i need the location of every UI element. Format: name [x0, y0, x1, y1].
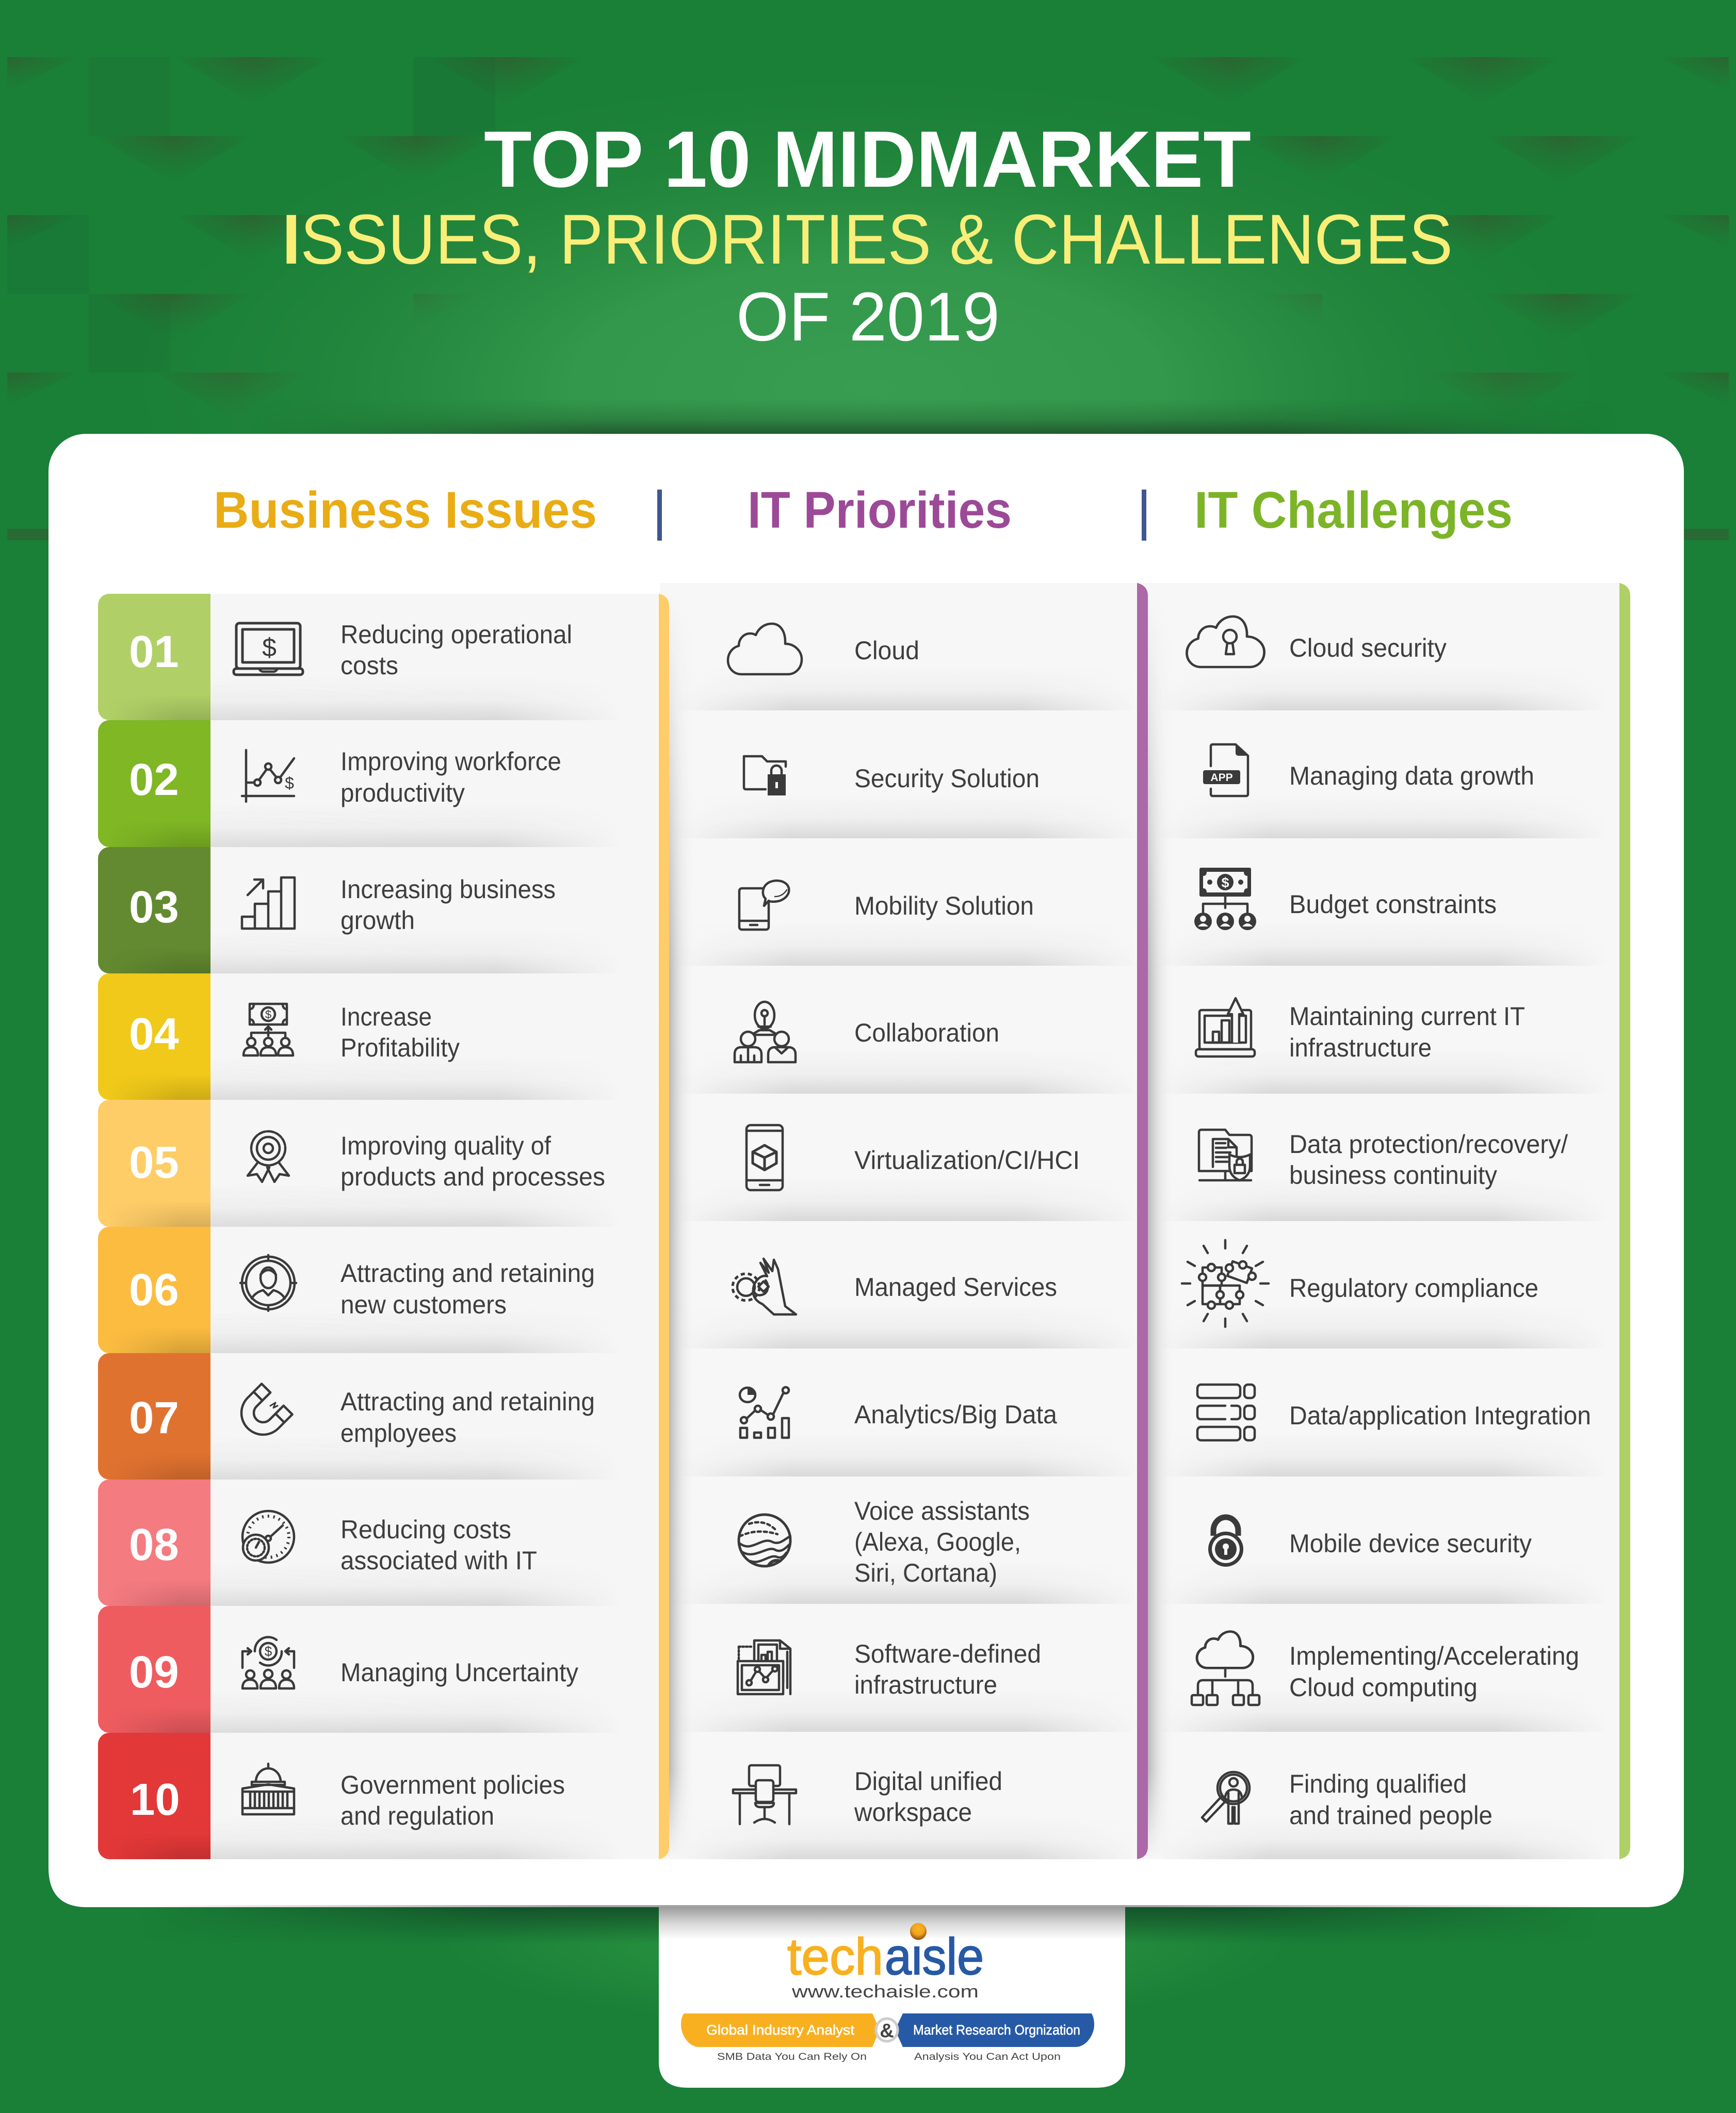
icon: cloud [728, 624, 802, 674]
icon: desk workspace [733, 1765, 796, 1824]
text: reducing costs: associated with IT [340, 1546, 537, 1575]
heading: it challenges: IT Challenges [1194, 481, 1513, 539]
text: improving workforce productivity [340, 747, 561, 807]
icon: mobile with speech bubble [739, 881, 789, 930]
text: managing uncertainty: Managing Uncertainty [340, 1658, 578, 1687]
text: software-defined infrastructure [854, 1639, 1041, 1699]
panel: footer logo card [659, 1904, 1125, 2088]
text: analytics/big data: Analytics/Big Data [854, 1400, 1057, 1429]
icon: voice globe [739, 1515, 790, 1566]
icon: cloud network [1192, 1632, 1259, 1705]
text: maintaining current it infrastructure: Maintaining current IT [1289, 1002, 1525, 1031]
text: increase profitability [340, 1002, 460, 1062]
accent bar: purple [1137, 583, 1148, 1859]
text: new customers [340, 1259, 595, 1319]
icon: budget constraints: $ [1221, 875, 1229, 890]
row 01 [98, 594, 621, 720]
icon: software-defined dashboard [738, 1640, 790, 1694]
text: mobility solution: Mobility Solution [854, 891, 1034, 920]
icon: budget constraints [1194, 868, 1256, 930]
text: cloud: Cloud [854, 636, 919, 665]
text: voice assistants: Siri, Cortana) [854, 1558, 997, 1587]
text: data protection: Data protection/recovery/ [1289, 1130, 1568, 1159]
text: improving quality [340, 1131, 605, 1191]
number badge 09: 09 [129, 1647, 179, 1697]
text: employees: Attracting and retaining [340, 1387, 595, 1416]
text: reducing operational costs [340, 620, 572, 680]
text: improving workforce productivity: Improving workforce [340, 747, 561, 776]
icon: money and team: $ [265, 1008, 271, 1021]
number badge 02 [98, 720, 221, 847]
row 05 [98, 1100, 621, 1227]
number badge 03: 03 [129, 882, 179, 932]
icon: gauge [242, 1511, 294, 1563]
icon: padlock [1208, 1517, 1243, 1567]
text: voice assistants [854, 1497, 1030, 1587]
number badge 01 [98, 594, 221, 720]
text: government policies [340, 1770, 565, 1830]
icon: collaboration [735, 1002, 796, 1062]
text: increasing business growth [340, 875, 556, 935]
icon: data protection folder [1199, 1130, 1252, 1180]
text: data/application integration: Data/application Integration [1289, 1401, 1591, 1430]
banner: market research organization: Market Research Orgnization [913, 2022, 1080, 2038]
logo: techaisle: tech [787, 1928, 883, 1986]
banner: global industry analyst: Global Industry Analyst [706, 2022, 855, 2038]
title: TOP 10 MIDMARKET [484, 115, 1251, 204]
heading: business issues: Business Issues [214, 481, 597, 539]
text: collaboration: Collaboration [854, 1018, 999, 1047]
number badge 10: 10 [130, 1775, 180, 1825]
text: improving quality: products and processes [340, 1162, 605, 1191]
text: increase profitability: Increase [340, 1002, 432, 1031]
panel: business issues column [98, 594, 660, 1859]
icon: analytics [740, 1387, 789, 1438]
number badge 01: 01 [129, 627, 179, 677]
title: ISSUES, PRIORITIES & CHALLENGES [282, 200, 1453, 279]
text: software-defined infrastructure: Software-defined [854, 1639, 1041, 1668]
panel: it challenges column [1137, 583, 1630, 1859]
row 07 [98, 1353, 621, 1480]
card body [48, 516, 1684, 1907]
text: managing data growth: Managing data growth [1289, 761, 1534, 790]
icon: app file: APP [1210, 772, 1233, 784]
text: reducing operational costs: Reducing operational [340, 620, 572, 649]
icon: uncertainty people and dollar [242, 1637, 294, 1688]
icon: chart with dollar: $ [285, 774, 294, 792]
icon: growth bars [242, 877, 295, 929]
text: security solution: Security Solution [854, 764, 1040, 793]
icon: managed services hand and gear [733, 1259, 796, 1314]
icon: customer target [240, 1255, 296, 1311]
text: finding qualified people [1289, 1769, 1492, 1830]
text: new customers: Attracting and retaining [340, 1259, 595, 1288]
row 06 [98, 1227, 621, 1353]
number badge 05 [98, 1100, 221, 1227]
banner: global industry analyst [681, 2013, 880, 2047]
icon: app file [1203, 744, 1248, 796]
tagline left: SMB Data You Can Rely On [717, 2052, 867, 2062]
divider 1 [657, 490, 662, 541]
number badge 06: 06 [129, 1265, 179, 1315]
number badge 08: 08 [129, 1520, 179, 1570]
text: government policies: and regulation [340, 1801, 494, 1830]
text: reducing costs [340, 1515, 537, 1575]
icon: magnet [233, 1384, 293, 1443]
row 04 [98, 973, 621, 1100]
text: new customers: new customers [340, 1290, 507, 1319]
logo: techaisle: aisle [885, 1928, 984, 1986]
icon: phone with cube [747, 1125, 783, 1190]
text: cloud security: Cloud security [1289, 633, 1447, 662]
text: maintaining current it infrastructure: infrastructure [1289, 1033, 1432, 1062]
row 08 [98, 1480, 621, 1606]
number badge 02: 02 [129, 755, 179, 805]
logo: techaisle [787, 1923, 984, 1986]
text: increasing business growth: Increasing business [340, 875, 556, 904]
icon: government building [242, 1764, 294, 1814]
website url: www.techaisle.com [791, 1982, 979, 2002]
icon: data integration servers [1197, 1385, 1255, 1440]
accent bar: amber [659, 594, 669, 1859]
icon: laptop with growth arrow [1196, 998, 1255, 1056]
text: maintaining current it infrastructure [1289, 1002, 1525, 1062]
text: reducing costs: Reducing costs [340, 1515, 511, 1544]
text: budget constraints: Budget constraints [1289, 890, 1497, 919]
row 09 [98, 1606, 621, 1733]
icon: cloud security [1187, 616, 1264, 667]
icon: laptop with dollar: $ [262, 633, 277, 662]
text: employees [340, 1387, 595, 1448]
row 03 [98, 847, 621, 973]
icon: quality rosette [248, 1131, 289, 1182]
divider 2 [1142, 490, 1146, 541]
ampersand badge [876, 2019, 898, 2042]
panel: it priorities column [659, 583, 1138, 1859]
text: employees: employees [340, 1419, 457, 1448]
panel: main white card [48, 434, 1684, 875]
text: improving workforce productivity: productivity [340, 778, 465, 807]
text: regulatory compliance: Regulatory compliance [1289, 1274, 1538, 1303]
text: reducing operational costs: costs [340, 651, 398, 680]
text: voice assistants: (Alexa, Google, [854, 1527, 1021, 1556]
row 02 [98, 720, 621, 847]
icon: magnifier over person [1202, 1772, 1250, 1824]
text: virtualization: Virtualization/CI/HCI [854, 1146, 1080, 1175]
ampersand badge: & [880, 2020, 894, 2042]
text: finding qualified people: and trained people [1289, 1801, 1492, 1830]
number badge 07 [98, 1353, 221, 1480]
number badge 07: 07 [129, 1393, 179, 1443]
title [282, 115, 1453, 355]
text: data protection [1289, 1130, 1568, 1190]
icon: regulatory puzzle [1182, 1240, 1269, 1327]
number badge 03 [98, 847, 221, 973]
text: increasing business growth: growth [340, 906, 415, 935]
number badge 06 [98, 1227, 221, 1353]
text: finding qualified people: Finding qualified [1289, 1769, 1467, 1798]
row 10 [98, 1733, 621, 1859]
text: improving quality: Improving quality of [340, 1131, 551, 1160]
text: software-defined infrastructure: infrastructure [854, 1670, 997, 1699]
number badge 09 [98, 1606, 221, 1733]
icon: chart with dollar [242, 750, 294, 802]
number badge 10 [98, 1733, 221, 1859]
tagline right: Analysis You Can Act Upon [914, 2052, 1061, 2062]
text: digital unified workspace [854, 1767, 1002, 1827]
number badge 08 [98, 1480, 221, 1606]
text: digital unified workspace: workspace [854, 1798, 972, 1827]
number badge 04: 04 [129, 1009, 179, 1059]
text: implementing cloud computing [1289, 1641, 1579, 1702]
text: government policies: Government policies [340, 1770, 565, 1799]
number badge 05: 05 [129, 1137, 179, 1188]
icon: uncertainty people and dollar: $ [265, 1644, 272, 1659]
accent bar: green [1619, 583, 1630, 1859]
heading: it priorities: IT Priorities [748, 481, 1012, 539]
text: implementing cloud computing: Cloud computing [1289, 1673, 1478, 1702]
text: increase profitability: Profitability [340, 1033, 460, 1062]
number badge 04 [98, 973, 221, 1100]
icon: laptop with dollar [234, 623, 303, 675]
text: managed services: Managed Services [854, 1273, 1057, 1302]
icon: folder lock [744, 756, 786, 795]
title: OF 2019 [736, 279, 1000, 355]
text: mobile device security: Mobile device security [1289, 1529, 1532, 1558]
text: data protection: business continuity [1289, 1161, 1497, 1190]
banner: market research organization [895, 2013, 1094, 2047]
text: digital unified workspace: Digital unified [854, 1767, 1002, 1796]
text: voice assistants: Voice assistants [854, 1497, 1030, 1525]
icon: money and team [244, 1004, 293, 1055]
text: implementing cloud computing: Implementing/Accelerating [1289, 1641, 1579, 1670]
